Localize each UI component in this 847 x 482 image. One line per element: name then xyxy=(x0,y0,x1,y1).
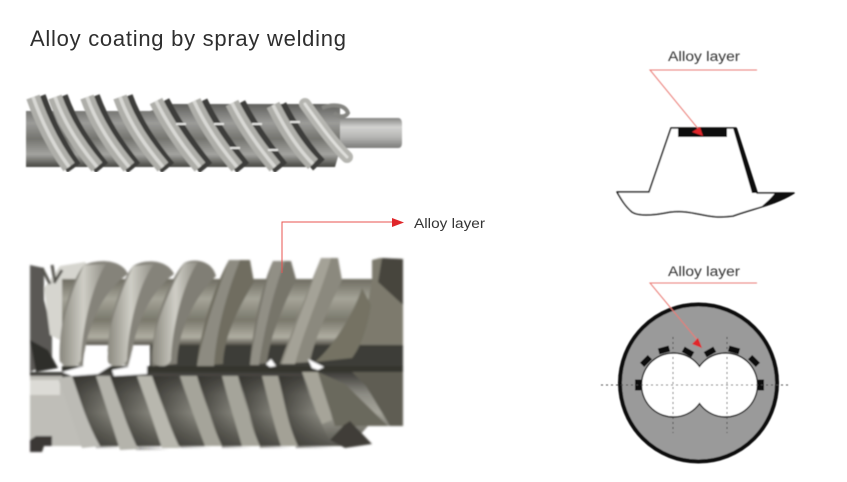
arrowhead xyxy=(392,218,404,227)
arrowhead xyxy=(692,338,702,348)
leader xyxy=(650,283,757,342)
flights, upper xyxy=(60,261,128,366)
barrel xyxy=(620,304,777,462)
photo: single screw xyxy=(26,97,402,168)
white gaps between screws xyxy=(62,353,112,376)
bore xyxy=(641,353,758,417)
flight outline xyxy=(617,128,794,217)
photo: twin screws xyxy=(30,258,403,452)
label: Alloy layer xyxy=(668,264,741,279)
screw body xyxy=(26,104,340,167)
end shaft xyxy=(338,118,402,148)
leader: photo callout xyxy=(282,218,404,273)
leader xyxy=(650,70,757,131)
helical flights xyxy=(33,97,348,168)
highlights on shaft xyxy=(176,122,300,150)
title: Alloy coating by spray welding xyxy=(30,26,346,51)
arrowhead xyxy=(692,127,703,136)
flights, lower xyxy=(72,376,130,448)
diagram: flight cross-section xyxy=(617,49,795,217)
label: Alloy layer xyxy=(668,49,741,64)
label: photo callout: Alloy layer xyxy=(414,216,486,231)
upper screw xyxy=(30,258,403,372)
thick right wall xyxy=(733,128,758,193)
thick base tip xyxy=(762,193,795,206)
alloy pad xyxy=(678,128,727,137)
diagram: barrel cross-section xyxy=(601,264,790,462)
lower screw xyxy=(30,366,403,452)
alloy pads xyxy=(635,346,764,390)
centre lines xyxy=(601,337,790,433)
